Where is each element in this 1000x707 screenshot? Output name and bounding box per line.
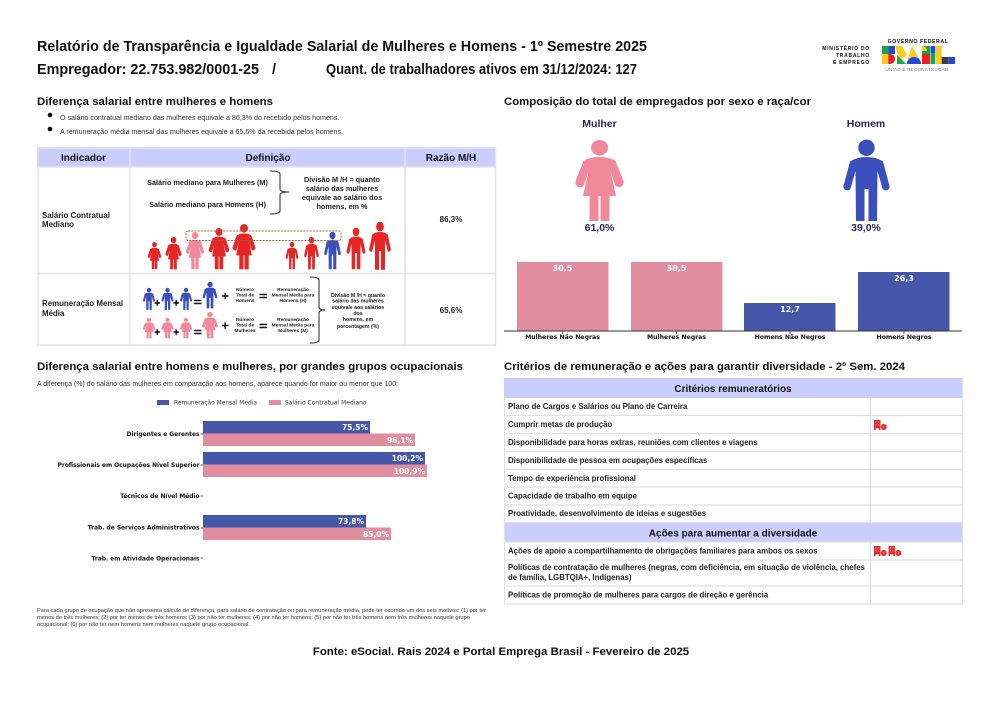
logo: governo federal brasil <box>882 39 955 72</box>
indicator table <box>37 147 496 346</box>
row: remuneração mensal média: salário das mulheres <box>332 298 384 304</box>
woman share: 61,0% <box>585 222 615 234</box>
men formula: Mensal Média para <box>272 292 315 298</box>
women formula: Mulheres (M) <box>278 328 308 334</box>
women formula: Mulheres <box>234 328 256 334</box>
icon: empresa <box>874 420 887 430</box>
row: remuneração mensal média: dos <box>353 311 363 317</box>
criteria table: Políticas de contratação de mulheres (negras, com deficiência, em situação de violência, chefes <box>508 563 866 572</box>
horizontal bar chart: 75,5% <box>342 423 368 432</box>
horizontal bar chart <box>58 421 427 562</box>
criteria table: Disponibilidade de pessoa em ocupações específicas <box>508 456 708 465</box>
horizontal bar chart: Trab. em Atividade Operacionais <box>92 556 200 562</box>
indicator table: Indicador <box>61 153 106 164</box>
logo: governo federal brasil: UNIÃO E RECONSTRUÇÃO <box>885 66 949 72</box>
criteria table: Proatividade, desenvolvimento de ideias e sugestões <box>508 509 707 518</box>
footnote <box>37 608 486 628</box>
column chart <box>504 262 962 341</box>
men formula: Homens (H) <box>280 298 307 304</box>
horizontal bar chart: 100,9% <box>394 467 425 476</box>
heading: Composição do total de empregados por sexo e raça/cor <box>504 96 812 108</box>
title: Empregador: 22.753.982/0001-25 <box>37 62 259 78</box>
woman share <box>575 118 624 234</box>
horizontal bar chart: Trab. de Serviços Administrativos <box>88 526 200 532</box>
column chart: 26,3 <box>894 274 914 283</box>
column chart: 12,7 <box>780 305 800 314</box>
row: salário contratual mediano: Salário mediano para Homens (H) <box>149 200 266 209</box>
row: remuneração mensal média: Remuneração Mensal <box>42 299 123 308</box>
women formula: Total de <box>236 322 254 328</box>
title <box>37 39 647 78</box>
source note: Fonte: eSocial. Rais 2024 e Portal Emprega Brasil - Fevereiro de 2025 <box>313 646 690 658</box>
row: remuneração mensal média: porcentagem (%) <box>337 324 379 330</box>
bullet list: A remuneração média mensal das mulheres equivale a 65,6% da recebida pelos homens. <box>60 128 343 136</box>
row: remuneração mensal média: Divisão M /H = quanto <box>331 293 385 299</box>
column chart: 30,5 <box>553 264 573 273</box>
row: salário contratual mediano: Salário Contratual <box>42 211 110 220</box>
title: / <box>272 62 276 78</box>
horizontal bar chart: Técnicos de Nível Médio <box>120 493 200 500</box>
criteria table <box>504 378 963 604</box>
row: remuneração mensal média: Média <box>42 309 65 318</box>
panel: composição por sexo e raça/cor <box>504 96 962 341</box>
horizontal bar chart: 96,1% <box>387 436 413 445</box>
logo: ministério do trabalho e emprego: MINISTÉRIO DO <box>822 44 870 52</box>
men pictograms <box>286 222 391 270</box>
women formula: Número <box>236 317 254 323</box>
men formula: Total de <box>236 292 254 298</box>
footnote: ocupacional; (6) por não ter nem homens nem mulheres naquele grupo ocupacional. <box>37 622 250 628</box>
subtitle: A diferença (%) do salário das mulheres em comparação aos homens, aparece quando for maior ou menor que 100: <box>37 381 398 388</box>
horizontal bar chart: 73,8% <box>338 517 364 526</box>
women formula <box>143 312 315 338</box>
logo: ministério do trabalho e emprego <box>822 44 870 66</box>
footnote: menos de três mulheres; (2) por ter menos de três homens; (3) por não ter mulheres; (4) por não ter homens; (5) por não ter três homens nem três mulheres naquele grupo <box>37 615 470 621</box>
men formula: Homens <box>236 298 255 304</box>
indicator table: Razão M/H <box>426 153 476 164</box>
row: remuneração mensal média: equivale aos salários <box>332 305 384 311</box>
horizontal bar chart: 85,0% <box>363 530 389 539</box>
women pictograms <box>148 224 255 269</box>
panel: critérios de remuneração e ações <box>504 361 963 604</box>
criteria table: Critérios remuneratórios <box>674 384 792 395</box>
heading: Critérios de remuneração e ações para garantir diversidade - 2º Sem. 2024 <box>504 361 906 373</box>
man share <box>843 118 890 234</box>
indicator table: Definição <box>245 153 291 164</box>
row: salário contratual mediano: salário das mulheres <box>306 184 378 193</box>
criteria table: Disponibilidade para horas extras, reuniões com clientes e viagens <box>508 438 758 447</box>
criteria table: Ações de apoio a compartilhamento de obrigações familiares para ambos os sexos <box>508 546 818 556</box>
row: salário contratual mediano: equivale ao salário dos <box>302 193 382 202</box>
column chart: Homens Não Negros <box>755 334 826 341</box>
criteria table: de família, LGBTQIA+, Indígenas) <box>508 573 632 582</box>
title: Quant. de trabalhadores ativos em 31/12/2024: 127 <box>326 62 637 78</box>
column chart: Mulheres Negras <box>647 334 706 341</box>
woman share: Mulher <box>582 118 617 130</box>
footnote: Para cada grupo de ocupação que não apresenta cálculo de diferença, para salário de contratação ou para remuneração média, pode ter ocorrido um dos seis motivos: (1) por ter <box>37 608 486 614</box>
column chart: 30,5 <box>667 264 687 273</box>
men formula <box>143 282 315 310</box>
row: remuneração mensal média: 65,6% <box>440 306 462 315</box>
horizontal bar chart: Profissionais em Ocupações Nível Superior <box>58 462 200 469</box>
title: Relatório de Transparência e Igualdade Salarial de Mulheres e Homens - 1º Semestre 2025 <box>37 39 647 55</box>
man share: Homem <box>847 118 885 130</box>
panel: diferença por grandes grupos ocupacionais <box>37 361 486 628</box>
logo: ministério do trabalho e emprego: TRABALHO <box>836 53 870 59</box>
women formula: Remuneração <box>277 317 309 323</box>
panel: diferença salarial entre mulheres e homens <box>37 96 496 346</box>
logo: ministério do trabalho e emprego: E EMPREGO <box>833 60 870 66</box>
row: salário contratual mediano: homens, em % <box>316 202 368 211</box>
row: remuneração mensal média: homens, em <box>343 317 374 323</box>
icon: empresa <box>888 546 901 556</box>
logo: governo federal brasil: GOVERNO FEDERAL <box>888 39 949 45</box>
criteria table: Políticas de promoção de mulheres para cargos de direção e gerência <box>508 590 769 600</box>
women formula: Mensal Média para <box>272 322 315 328</box>
legend: Remuneração Mensal Média <box>174 400 257 406</box>
heading: Diferença salarial entre mulheres e homens <box>37 96 273 108</box>
row: remuneração mensal média <box>42 277 462 343</box>
row: salário contratual mediano <box>42 171 462 270</box>
criteria table: Plano de Cargos e Salários ou Plano de Carreira <box>508 402 688 411</box>
row: salário contratual mediano: 86,3% <box>440 215 462 224</box>
legend <box>157 400 367 406</box>
legend: Salário Contratual Mediano <box>285 400 367 406</box>
row: salário contratual mediano: Divisão M /H = quanto <box>304 175 381 184</box>
icon: empresa <box>874 546 887 556</box>
median highlight box <box>186 231 341 240</box>
bullet list: O salário contratual mediano das mulheres equivale a 86,3% do recebido pelos homens. <box>60 114 339 122</box>
heading: Diferença salarial entre homens e mulheres, por grandes grupos ocupacionais <box>37 361 463 373</box>
criteria table: Cumprir metas de produção <box>508 420 612 429</box>
row: salário contratual mediano: Salário mediano para Mulheres (M) <box>147 178 268 187</box>
horizontal bar chart: Dirigentes e Gerentes <box>127 432 200 438</box>
column chart: Mulheres Não Negras <box>525 334 600 341</box>
row: salário contratual mediano: Mediano <box>42 220 74 229</box>
criteria table: Ações para aumentar a diversidade <box>649 528 818 540</box>
man share: 39,0% <box>851 222 882 234</box>
criteria table: Tempo de experiência profissional <box>508 474 636 483</box>
criteria table: Capacidade de trabalho em equipe <box>508 492 638 500</box>
men formula: Remuneração <box>277 287 309 293</box>
column chart: Homens Negros <box>876 334 932 341</box>
bullet list <box>48 113 343 136</box>
men formula: Número <box>236 287 254 293</box>
horizontal bar chart: 100,2% <box>392 454 423 463</box>
